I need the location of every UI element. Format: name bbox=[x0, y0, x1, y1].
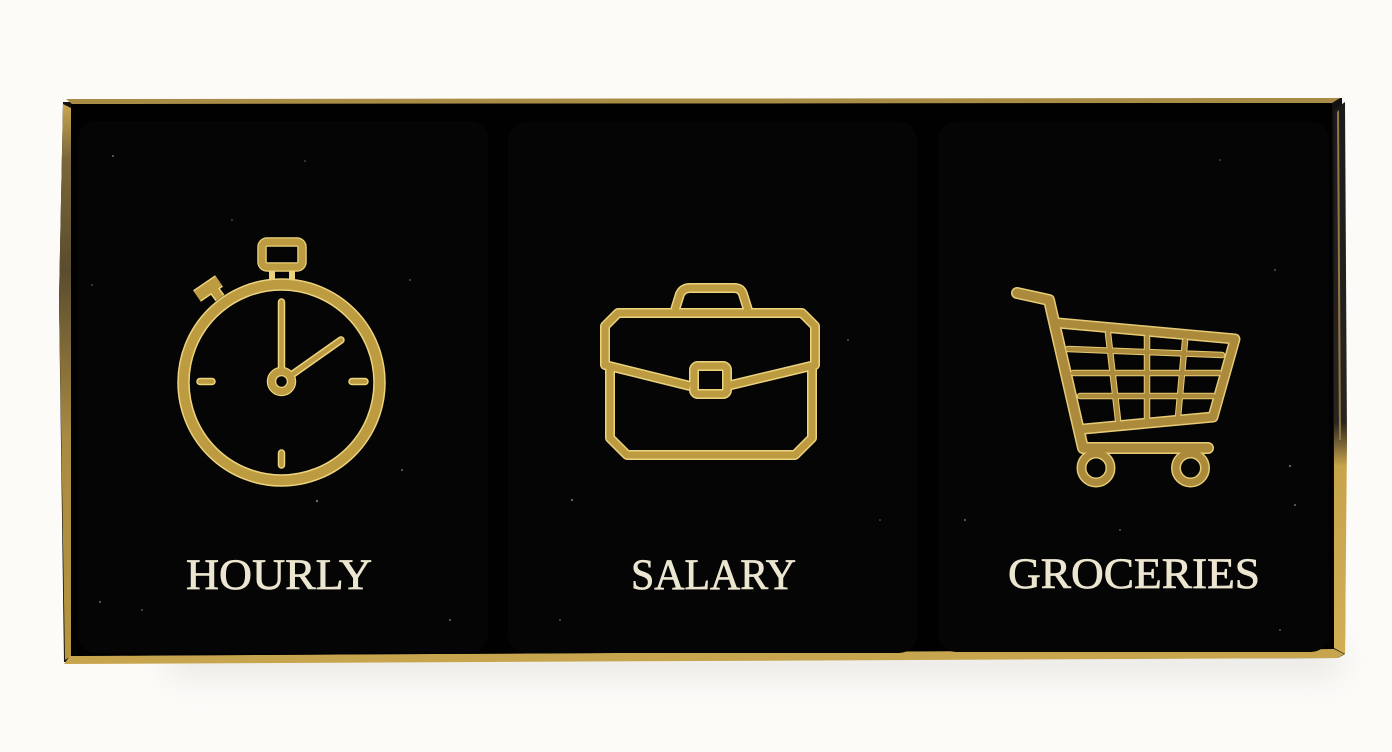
gift box tray bbox=[59, 98, 1347, 664]
velvet card bbox=[78, 121, 488, 653]
label: groceries: GROCERIES bbox=[1008, 551, 1260, 598]
velvet specks bbox=[91, 155, 1296, 631]
panel: salary bbox=[508, 122, 917, 653]
icon: shopping cart bbox=[1017, 293, 1235, 482]
velvet card bbox=[938, 122, 1329, 652]
icon: briefcase bbox=[605, 288, 815, 455]
velvet card bbox=[508, 122, 917, 653]
icon: stopwatch bbox=[184, 242, 380, 480]
box shadow bbox=[170, 645, 1340, 675]
panel: hourly bbox=[78, 121, 488, 653]
tray right gold streak bbox=[1337, 110, 1341, 440]
tray inner well bbox=[71, 103, 1334, 656]
tray top gold rim bbox=[66, 98, 1340, 104]
tray outer edge bbox=[59, 98, 1346, 662]
label: salary: SALARY bbox=[631, 552, 796, 599]
tray left gold rim bbox=[59, 104, 71, 660]
tray right rim bbox=[1334, 102, 1347, 654]
label: hourly: HOURLY bbox=[186, 552, 372, 599]
tray bottom gold rim bbox=[64, 649, 1344, 664]
panel: groceries bbox=[938, 122, 1329, 652]
